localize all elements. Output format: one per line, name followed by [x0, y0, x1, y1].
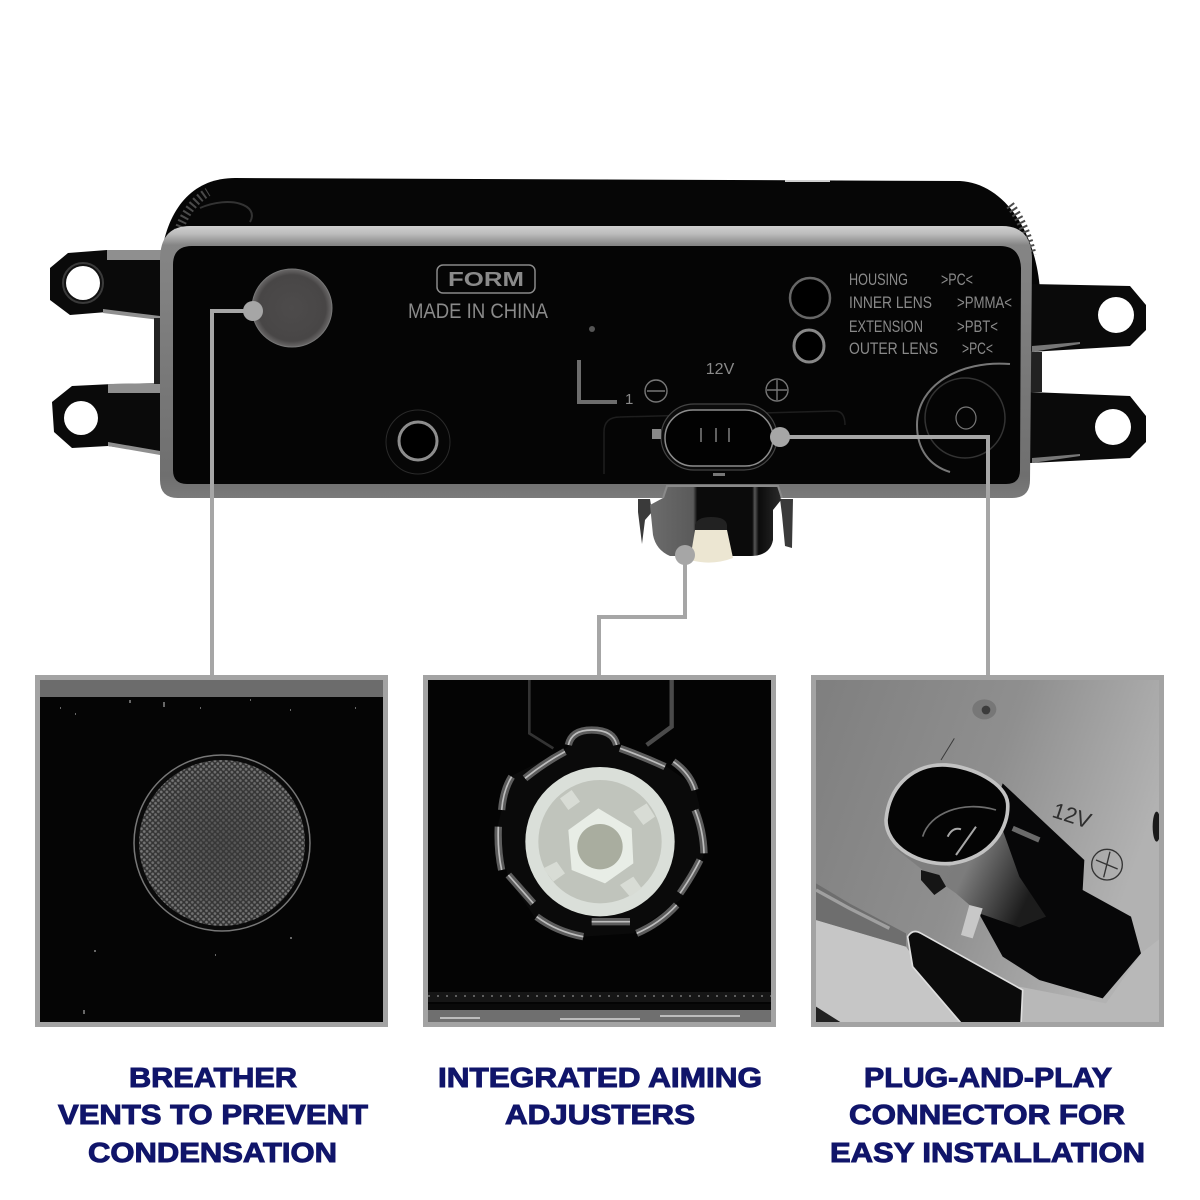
white adjuster disc	[525, 767, 675, 916]
molded plus symbol	[1092, 849, 1122, 880]
L mark	[579, 360, 617, 402]
caption: breather vents: VENTS TO PREVENT	[58, 1099, 368, 1130]
molded ridge	[816, 883, 906, 947]
caption: breather vents: CONDENSATION	[88, 1137, 337, 1168]
screw point	[589, 326, 595, 332]
disc tabs	[543, 790, 655, 897]
upper right socket	[790, 278, 830, 318]
panel: breather vent close-up	[38, 678, 386, 1024]
vent membrane	[134, 755, 310, 931]
FORM logo: FORM	[448, 269, 524, 291]
lower right surface	[1020, 986, 1078, 1022]
made in china: MADE IN CHINA	[408, 300, 548, 323]
panel: aiming adjuster close-up	[426, 678, 774, 1024]
connector barrel	[893, 830, 1046, 927]
lower light surface	[816, 920, 963, 1027]
caption: breather vents	[58, 1062, 368, 1168]
connector recess	[604, 411, 845, 474]
panel: connector close-up	[814, 678, 1163, 1027]
dark slot	[908, 931, 1023, 1025]
headlight rear view	[50, 178, 1146, 563]
material markings: >PMMA<	[957, 293, 1012, 312]
lens base strip	[428, 992, 771, 1023]
pin tab	[961, 905, 983, 938]
caption: plug and play: PLUG-AND-PLAY	[864, 1062, 1112, 1093]
callout line: aiming adjuster	[599, 545, 695, 675]
caption: plug and play	[830, 1062, 1145, 1168]
adjuster circle	[917, 364, 1010, 472]
caption: plug and play: CONNECTOR FOR	[849, 1099, 1125, 1130]
bottom corner shadow	[816, 1006, 840, 1022]
caption: aiming adjusters: INTEGRATED AIMING	[438, 1062, 762, 1093]
material markings: >PC<	[962, 339, 993, 358]
material markings: OUTER LENS	[849, 339, 938, 358]
adjuster collar	[497, 730, 705, 937]
voltage label: 12V	[706, 361, 735, 378]
material markings: >PC<	[941, 270, 973, 289]
molded voltage text: 12V	[1049, 798, 1095, 834]
molded stroke	[941, 738, 954, 760]
material markings: INNER LENS	[849, 293, 932, 312]
caption: aiming adjusters	[438, 1062, 762, 1130]
frame ribs	[529, 680, 553, 748]
material markings	[849, 270, 1012, 358]
screw boss	[972, 699, 996, 719]
minus symbol	[645, 380, 667, 402]
hex bolt	[568, 808, 633, 883]
rear housing shell	[160, 178, 1040, 300]
caption: breather vents: BREATHER	[129, 1062, 297, 1093]
left socket hole	[386, 410, 450, 474]
side hole	[1152, 812, 1159, 842]
caption: plug and play: EASY INSTALLATION	[830, 1137, 1145, 1168]
highlight on barrel	[1013, 828, 1039, 840]
main body with rim	[160, 226, 1032, 498]
breather vent	[252, 269, 332, 347]
lower right socket	[794, 330, 824, 362]
digit 1: 1	[625, 391, 633, 408]
material markings: EXTENSION	[849, 317, 923, 336]
FORM logo	[437, 265, 535, 293]
connector mouth	[886, 765, 1008, 864]
adjuster socket below body	[638, 486, 793, 563]
plus symbol	[766, 379, 788, 401]
material markings: >PBT<	[957, 317, 998, 336]
caption: aiming adjusters: ADJUSTERS	[505, 1099, 695, 1130]
left mounting tabs	[50, 250, 167, 455]
latch	[921, 870, 946, 895]
callout line: breather vent	[212, 301, 263, 675]
right mounting tabs	[1030, 284, 1146, 463]
material markings: HOUSING	[849, 270, 908, 289]
shadowed recess	[966, 783, 1141, 998]
electrical connector	[652, 404, 777, 476]
callout line: connector	[770, 427, 988, 675]
